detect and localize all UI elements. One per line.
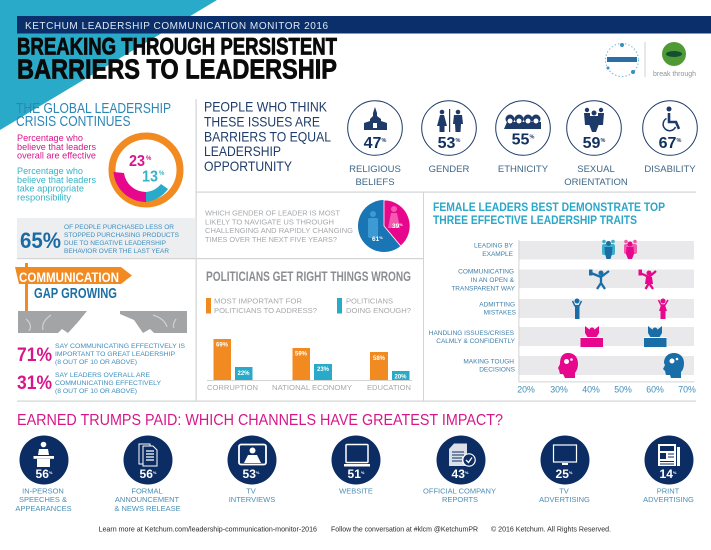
legend: DOING ENOUGH?: [346, 306, 411, 315]
barrier: disability: DISABILITY: [644, 164, 696, 175]
icon: pink megaphone figure: [638, 270, 656, 289]
heading: crisis: CRISIS CONTINUES: [16, 114, 130, 130]
bar chart: 58%: [373, 356, 386, 362]
panel: barriers to equal leadership: [204, 98, 697, 188]
heading: barriers: PEOPLE WHO THINK: [204, 98, 328, 114]
text: question: LIKELY TO NAVIGATE US THROUGH: [205, 218, 334, 226]
heading: female leaders: THREE EFFECTIVE LEADERSHIP TRAITS: [433, 213, 637, 227]
row labels: MISTAKES: [484, 310, 517, 316]
channel: tv interviews: %: [256, 470, 260, 475]
icon: newspaper: [658, 444, 680, 466]
channel: formal announcement: ANNOUNCEMENT: [115, 495, 180, 504]
heading: crisis: THE GLOBAL LEADERSHIP: [16, 101, 171, 117]
top banner: KETCHUM LEADERSHIP COMMUNICATION MONITOR 2016: [25, 21, 328, 32]
icon: pink desk: [580, 326, 603, 347]
channel: tv interviews: 53: [243, 467, 256, 481]
text: question: [205, 210, 353, 244]
pie chart: %: [379, 235, 383, 240]
dot plot bands: [519, 241, 694, 375]
bar chart: 20%: [394, 374, 407, 380]
barrier: sexual orientation: %: [600, 138, 605, 144]
row labels: IN AN OPEN &: [471, 277, 515, 284]
stat: 65 percent: [17, 218, 195, 258]
row labels: DECISIONS: [479, 366, 516, 374]
barrier: sexual orientation: [564, 101, 628, 188]
channel: official company reports: [423, 436, 496, 504]
icon: pink head: [558, 353, 578, 378]
barrier: sexual orientation: ORIENTATION: [564, 177, 628, 188]
stat: 31 percent: (8 OUT OF 10 OR ABOVE): [55, 388, 137, 395]
x axis labels: 30%: [550, 384, 568, 394]
heading: barriers: THESE ISSUES ARE: [204, 114, 320, 130]
icon: laptop: [344, 444, 370, 466]
heading: barriers: BARRIERS TO EQUAL: [204, 128, 331, 144]
channel: official company reports: %: [465, 470, 469, 475]
barrier: gender: %: [455, 138, 460, 144]
icon: tv: [554, 445, 576, 465]
channel: tv advertising: ADVERTISING: [539, 495, 590, 504]
donut chart: 23: [129, 153, 145, 170]
row labels: LEADING BY: [474, 242, 514, 250]
channel: tv advertising: 25: [556, 467, 569, 481]
stat: 65 percent: 65%: [20, 228, 61, 253]
donut chart: 13: [142, 168, 158, 186]
icon: blue desk: [644, 326, 666, 347]
heading: barriers: OPPORTUNITY: [204, 158, 293, 174]
icon: three people: [584, 108, 604, 132]
signpost: [15, 263, 132, 311]
stat: 31 percent: [17, 372, 161, 395]
row labels: EXAMPLE: [482, 251, 514, 258]
heading: barriers: LEADERSHIP: [204, 143, 281, 159]
channel: website: 51: [348, 467, 361, 481]
bar chart: 69%: [216, 342, 229, 348]
channel: tv interviews: TV: [246, 486, 256, 496]
icon: lectern: [34, 442, 54, 467]
stat: 71 percent: (8 OUT OF 10 OR ABOVE): [55, 359, 137, 366]
icon: woman and man: [437, 109, 463, 132]
donut chart: [112, 136, 180, 204]
barrier: gender: [422, 101, 476, 175]
pie chart: 61: [372, 236, 379, 243]
heading: crisis: [16, 101, 171, 130]
title: [17, 34, 337, 85]
footer: © 2016 Ketchum. All Rights Reserved.: [491, 526, 611, 534]
legend: POLITICIANS TO ADDRESS?: [214, 306, 317, 315]
signpost: COMMUNICATION: [19, 269, 119, 285]
pie chart: %: [399, 222, 403, 227]
channel: tv advertising: %: [569, 470, 573, 475]
channel: website: [332, 436, 380, 496]
barrier: disability: %: [676, 138, 681, 144]
channel: official company reports: OFFICIAL COMPANY: [423, 486, 496, 496]
panel: politicians: [206, 268, 412, 392]
text: percentage responsibility: take appropriate: [17, 184, 84, 194]
channel: in-person speeches: IN-PERSON: [22, 486, 64, 496]
stat: 65 percent: BEHAVIOR OVER THE LAST YEAR: [64, 248, 169, 255]
channel: website: %: [361, 470, 365, 475]
icon: pink figure: [658, 298, 668, 319]
stat: 65 percent: STOPPED PURCHASING PRODUCTS: [64, 232, 179, 239]
donut chart: %: [159, 171, 165, 177]
row labels: HANDLING ISSUES/CRISES: [429, 330, 515, 337]
channel: website: WEBSITE: [339, 486, 373, 496]
legend: MOST IMPORTANT FOR: [214, 296, 302, 306]
icon: group of faces: [504, 114, 541, 129]
icon: documents: [139, 444, 157, 466]
channel: formal announcement: FORMAL: [131, 486, 163, 496]
pie chart: 39: [392, 223, 399, 230]
heading: barriers: [204, 98, 331, 174]
channel: in-person speeches: %: [49, 470, 53, 475]
barrier: ethnicity: ETHNICITY: [498, 164, 549, 175]
x axis labels: 60%: [646, 384, 664, 394]
signpost: GAP GROWING: [34, 285, 117, 302]
panel: which gender of leader: [205, 200, 410, 252]
icon: broken ground: [18, 311, 187, 333]
bar chart: CORRUPTION: [207, 383, 258, 392]
text: percentage effective: Percentage who: [17, 133, 83, 143]
row labels: TRANSPARENT WAY: [451, 286, 516, 292]
bar chart: 23%: [317, 367, 330, 373]
icon: blue group: [602, 240, 615, 259]
text: percentage responsibility: Percentage who: [17, 166, 83, 176]
bar chart: NATIONAL ECONOMY: [272, 383, 352, 392]
row labels: [429, 242, 517, 374]
barrier: ethnicity: 55: [512, 132, 529, 148]
channel: print advertising: %: [673, 470, 677, 475]
top banner: [17, 16, 711, 34]
channel: tv interviews: [228, 436, 276, 504]
icon: tv interview: [239, 444, 266, 464]
stat: 31 percent: 31%: [17, 372, 52, 394]
text: question: CHALLENGING AND RAPIDLY CHANGING: [205, 227, 353, 235]
footer: Learn more at Ketchum.com/leadership-communication-monitor-2016: [98, 526, 317, 534]
stat: 71 percent: SAY COMMUNICATING EFFECTIVELY IS: [55, 343, 185, 350]
bar chart: [207, 339, 412, 392]
barrier: disability: [643, 101, 697, 175]
barrier: religious beliefs: BELIEFS: [355, 177, 395, 188]
text: question: WHICH GENDER OF LEADER IS MOST: [205, 210, 341, 218]
x axis labels: 20%: [517, 384, 535, 394]
x axis labels: [517, 384, 696, 394]
icon: blue head: [663, 353, 684, 378]
heading: female leaders: FEMALE LEADERS BEST DEMONSTRATE TOP: [433, 200, 665, 214]
icon: blue megaphone figure: [589, 270, 609, 289]
barrier: religious beliefs: 47: [364, 135, 381, 152]
axes: [518, 240, 694, 382]
icon: wheelchair: [663, 106, 679, 131]
title: BREAKING THROUGH PERSISTENT: [17, 34, 337, 60]
stat: 65 percent: DUE TO NEGATIVE LEADERSHIP: [64, 240, 166, 247]
channel: formal announcement: %: [153, 470, 157, 475]
barrier: disability: 67: [659, 135, 676, 152]
barrier: sexual orientation: SEXUAL: [577, 164, 615, 175]
donut chart: %: [146, 156, 152, 162]
channel: in-person speeches: SPEECHES &: [19, 495, 67, 504]
channel: tv advertising: TV: [559, 486, 569, 496]
channel: official company reports: 43: [452, 467, 465, 481]
bar chart: 59%: [295, 352, 308, 358]
title: BARRIERS TO LEADERSHIP: [17, 54, 337, 85]
icon: blue figure: [572, 298, 582, 319]
x axis labels: 70%: [678, 384, 696, 394]
channel: print advertising: PRINT: [657, 486, 680, 496]
pie chart: [358, 200, 410, 252]
panel: global leadership crisis: [16, 101, 195, 258]
panel: communication gap: [15, 263, 187, 395]
bar chart: 22%: [237, 371, 250, 377]
channel: print advertising: 14: [660, 467, 673, 481]
text: percentage responsibility: [17, 166, 97, 202]
row labels: COMMUNICATING: [458, 268, 514, 276]
logos: break through: [653, 71, 696, 78]
stat: 65 percent: OF PEOPLE PURCHASED LESS OR: [64, 224, 174, 231]
bar chart: EDUCATION: [367, 383, 411, 392]
teal corner triangle: [0, 0, 217, 130]
channel: official company reports: REPORTS: [442, 495, 478, 504]
legend: POLITICIANS: [346, 296, 393, 306]
icon: church: [364, 107, 387, 130]
barrier: religious beliefs: %: [381, 138, 386, 144]
row labels: ADMITTING: [479, 302, 515, 308]
stat: 71 percent: 71%: [17, 344, 52, 366]
barrier: gender: GENDER: [429, 164, 469, 175]
barrier: sexual orientation: 59: [583, 135, 600, 152]
text: question: TIMES OVER THE NEXT FIVE YEARS?: [205, 236, 337, 244]
text: percentage responsibility: believe that leaders: [17, 175, 97, 185]
channel: formal announcement: & NEWS RELEASE: [114, 504, 181, 513]
channel: in-person speeches: APPEARANCES: [15, 504, 72, 513]
stat: 71 percent: [17, 343, 185, 366]
footer: [98, 526, 611, 534]
barrier: gender: 53: [438, 135, 455, 152]
channel: formal announcement: 56: [140, 467, 153, 481]
text: percentage effective: believe that leaders: [17, 142, 97, 152]
x axis labels: 50%: [614, 384, 632, 394]
icon: report with check: [449, 444, 475, 466]
heading: earned trumps paid: EARNED TRUMPS PAID: WHICH CHANNELS HAVE GREATEST IMPACT?: [17, 412, 503, 429]
legend: [206, 296, 411, 315]
row labels: MAKING TOUGH: [463, 358, 514, 366]
channel: print advertising: [643, 436, 694, 504]
panel: female leaders traits: [429, 200, 696, 394]
text: percentage effective: overall are effective: [17, 150, 96, 160]
heading: female leaders: [433, 200, 665, 227]
channel: formal announcement: [114, 436, 181, 513]
x axis labels: 40%: [582, 384, 600, 394]
barrier: ethnicity: %: [529, 134, 534, 140]
channel: tv interviews: INTERVIEWS: [229, 495, 275, 504]
channel: in-person speeches: 56: [36, 467, 49, 481]
text: percentage responsibility: responsibility: [17, 192, 72, 202]
barrier: religious beliefs: RELIGIOUS: [349, 164, 401, 175]
channel: print advertising: ADVERTISING: [643, 495, 694, 504]
channel: tv advertising: [539, 436, 590, 504]
barrier: ethnicity: [496, 101, 550, 175]
footer: Follow the conversation at #klcm @KetchumPR: [331, 526, 478, 534]
stat: 31 percent: COMMUNICATING EFFECTIVELY: [55, 380, 161, 387]
row labels: CALMLY & CONFIDENTLY: [436, 338, 516, 345]
heading: politicians: POLITICIANS GET RIGHT THINGS WRONG: [206, 268, 411, 284]
icon: pink group: [624, 240, 637, 259]
text: percentage effective: [17, 133, 97, 160]
logos: [606, 42, 696, 78]
dividers: [17, 99, 696, 402]
stat: 71 percent: IMPORTANT TO GREAT LEADERSHIP: [55, 351, 175, 358]
barrier: religious beliefs: [348, 101, 402, 188]
channel: in-person speeches: [15, 436, 72, 513]
stat: 31 percent: SAY LEADERS OVERALL ARE: [55, 372, 150, 379]
